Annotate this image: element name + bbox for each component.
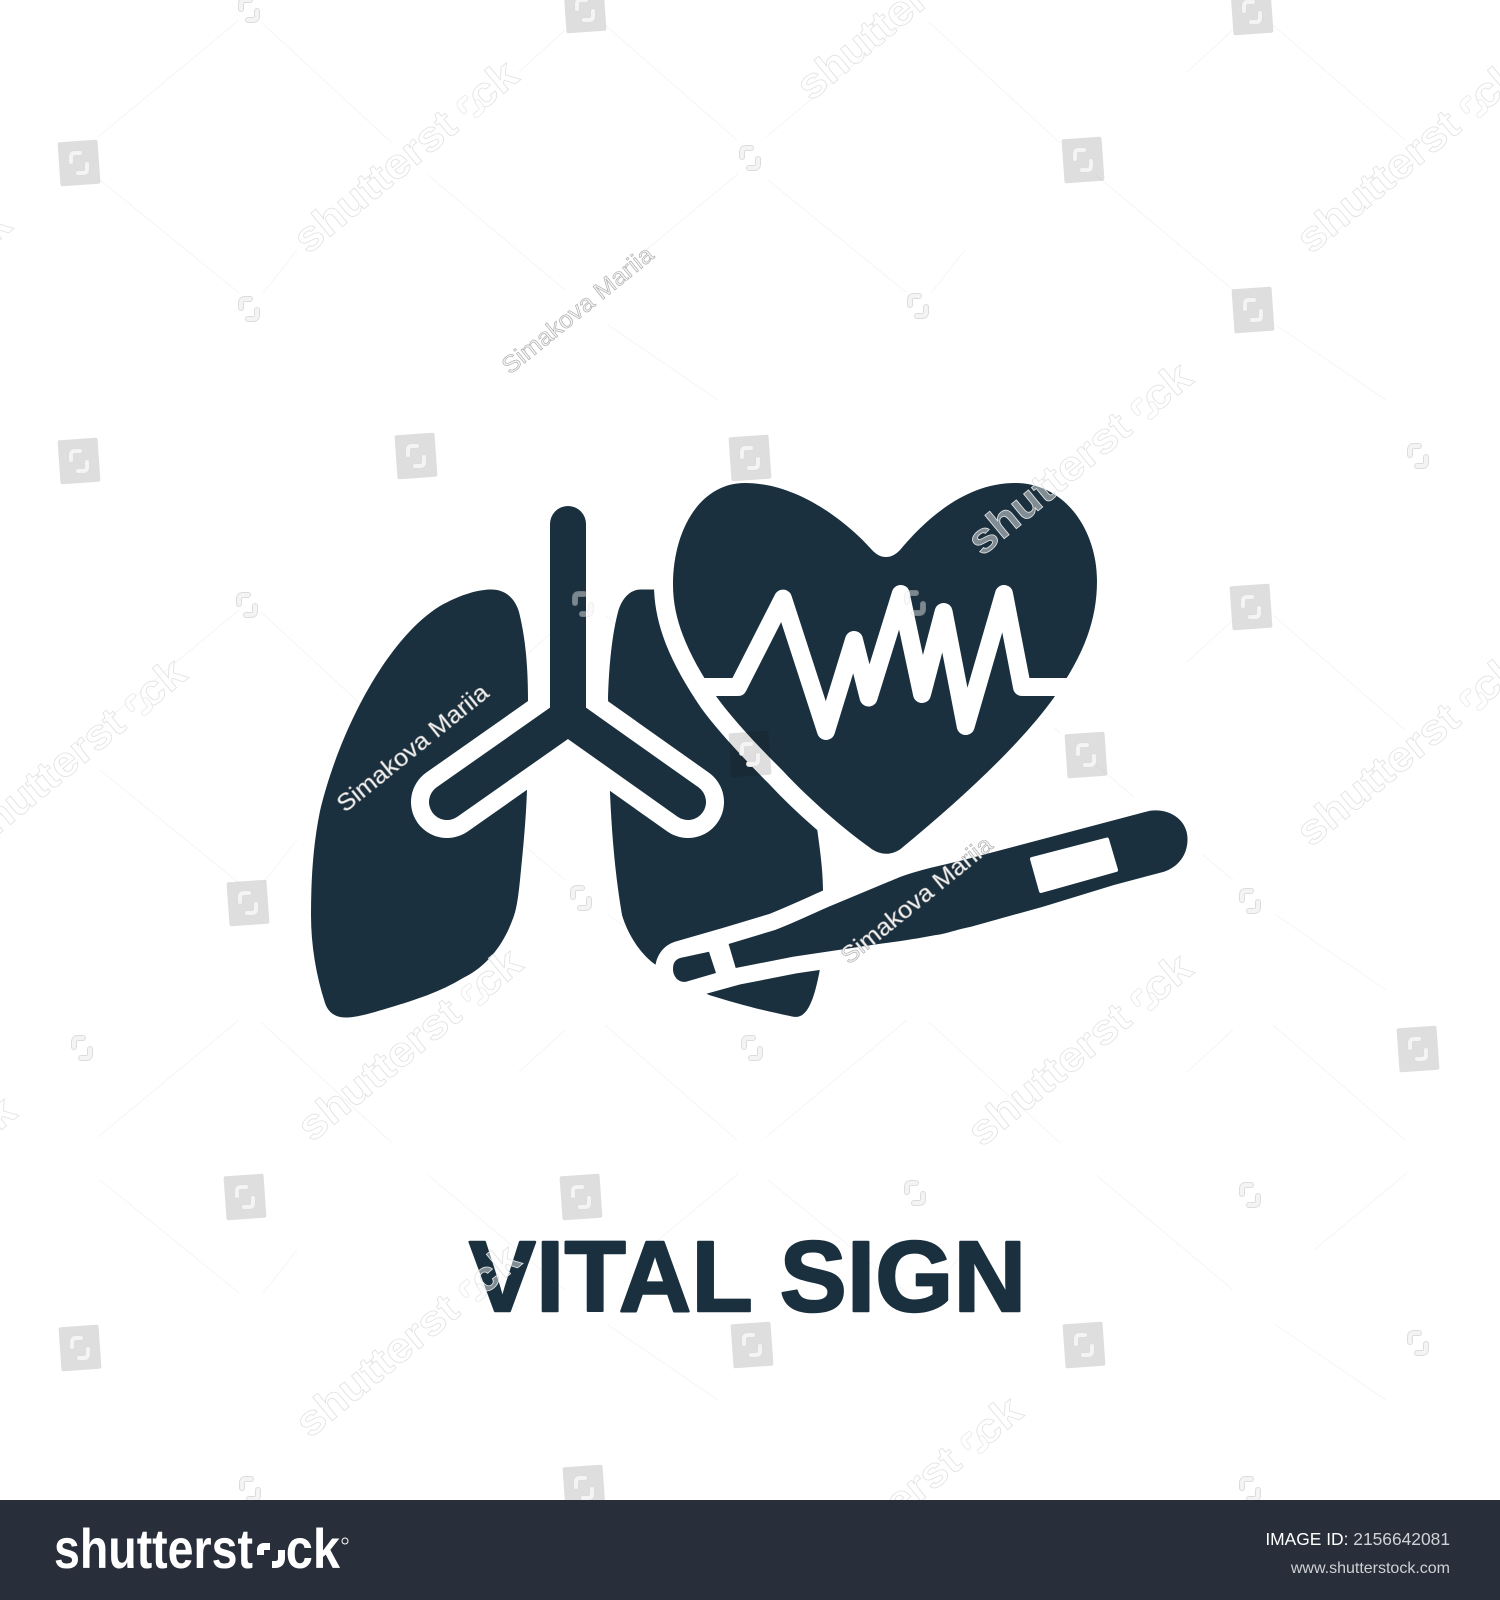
footer logo: shutterst: [54, 1517, 253, 1580]
icon: vital sign illustration: [311, 483, 1188, 1018]
watermark: contributor name repeats: Simakova Mariia: [332, 679, 495, 818]
watermark: shutterstock repeats: shutterstock: [958, 352, 1201, 564]
icon: right lung: [608, 590, 823, 1017]
watermark: shutterstock repeats: shutterstock: [788, 1386, 1031, 1598]
footer bar: [0, 1500, 1500, 1600]
icon: thermometer: [672, 810, 1188, 982]
watermark: shutterstock repeats: shutterstock: [286, 1234, 529, 1446]
watermark: contributor name repeats: Simakova Mariia: [836, 831, 999, 970]
watermark: contributor name repeats: Simakova Mariia: [497, 241, 660, 380]
footer website: www.shutterstock.com: [1290, 1560, 1450, 1577]
icon: trachea and bronchi: [447, 524, 688, 802]
footer image id: IMAGE ID: 2156642081: [1265, 1529, 1450, 1549]
watermark: shutterstock repeats: shutterstock: [288, 938, 531, 1150]
icon: left lung: [311, 589, 528, 1018]
watermark: shutterstock repeats: shutterstock: [958, 943, 1201, 1155]
watermark: shutterstock repeats: shutterstock: [284, 50, 527, 262]
icon: heart with pulse line: [673, 483, 1097, 854]
heading: VITAL SIGN: [469, 1221, 1026, 1333]
watermark: contributor name repeats: [332, 241, 999, 970]
faint watermark lattice: [98, 20, 1407, 1400]
